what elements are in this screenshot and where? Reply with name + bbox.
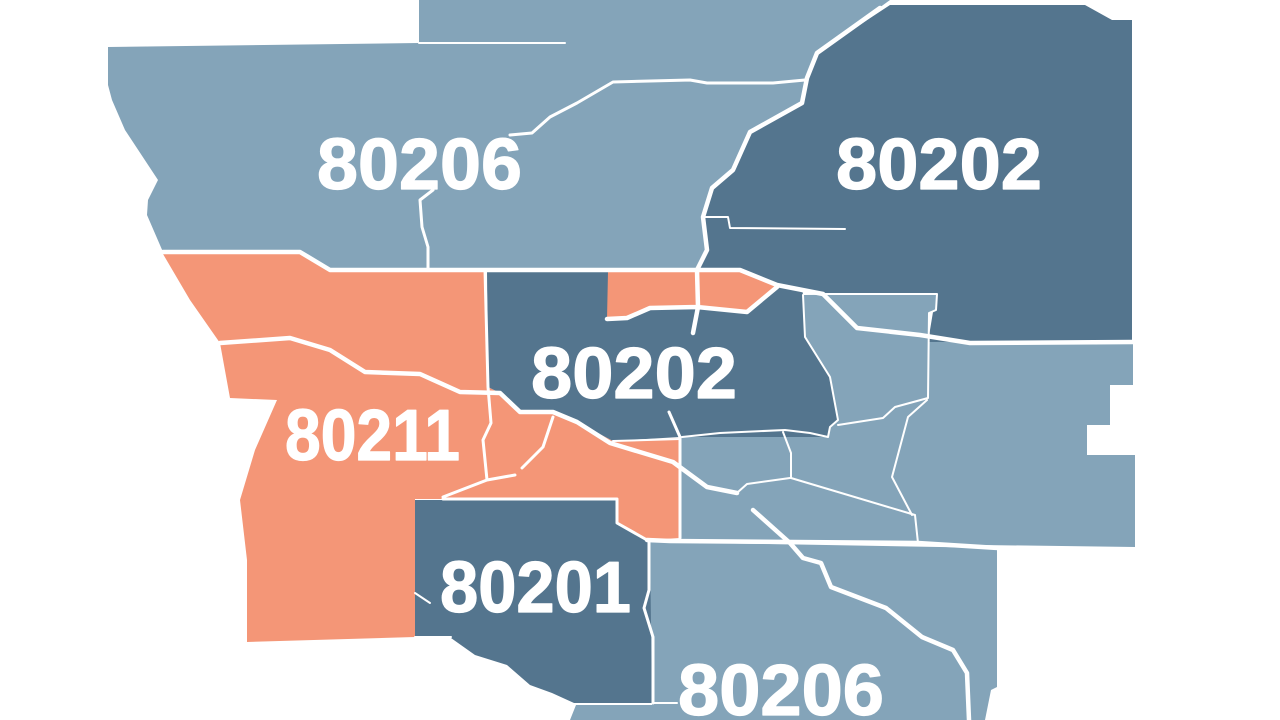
label: 80201 south central: 80201 (440, 548, 631, 628)
medium roads (420, 80, 805, 703)
region: south 80206 (570, 542, 997, 720)
region: small orange strip (607, 272, 777, 319)
road network (163, 8, 1133, 720)
region: east (680, 294, 1135, 547)
label: 80206 north-west: 80206 (317, 125, 522, 205)
thick roads (163, 8, 1133, 720)
label: 80211 west: 80211 (285, 396, 460, 476)
region: west 80211 (163, 252, 680, 642)
region: central 80202 (487, 270, 838, 441)
label: 80202 north-east: 80202 (836, 125, 1042, 205)
label: 80202 central: 80202 (531, 334, 737, 414)
region: north-west 80206 (108, 0, 890, 270)
region: north-east 80202 (697, 5, 1132, 342)
thin roads (415, 43, 937, 703)
region: south central 80201 (415, 500, 653, 703)
